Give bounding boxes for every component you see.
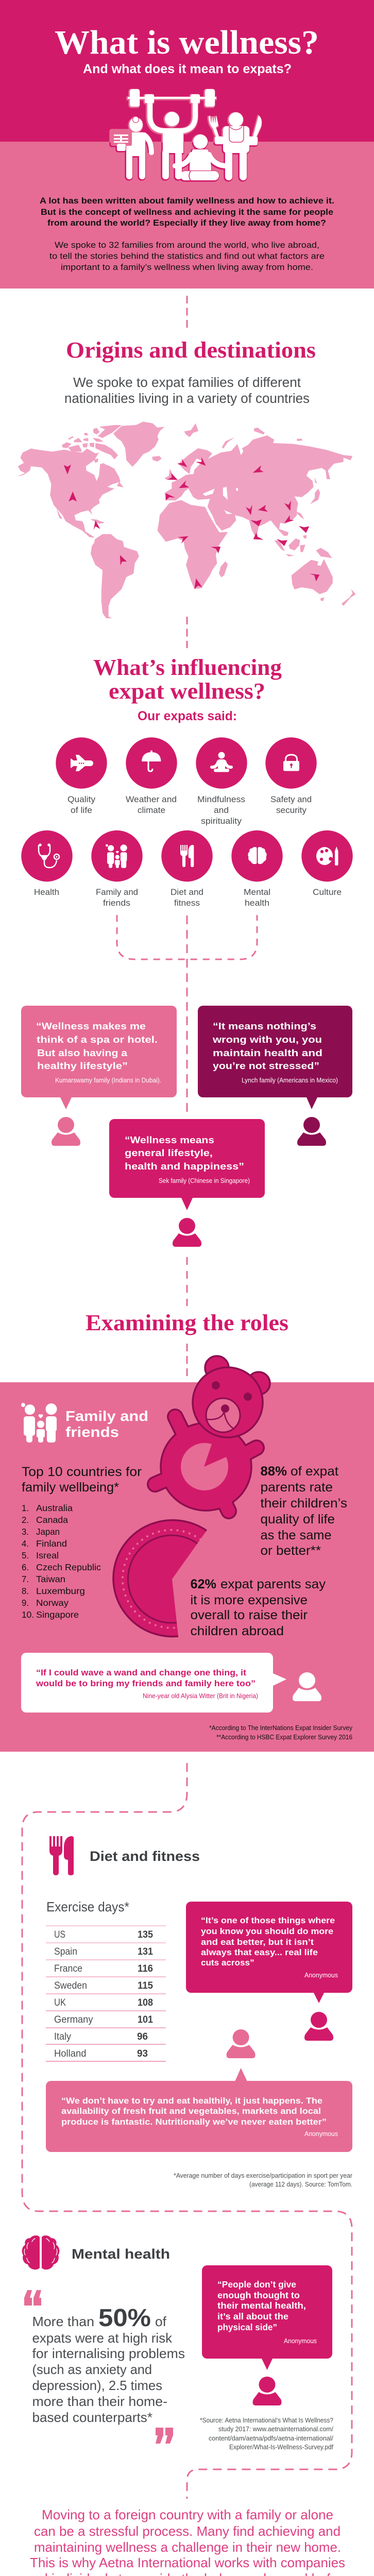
text: 50 percent stat: depression), 2.5 times	[32, 2378, 162, 2393]
list: top 10 countries: 5.	[22, 1550, 29, 1561]
text: 88 percent stat: 88%	[261, 1464, 287, 1479]
text: expat families: We spoke to expat families of different	[73, 376, 301, 390]
quote: Lynch family: you’re not stressed”	[213, 1060, 319, 1071]
text: 50 percent stat: of	[155, 2314, 167, 2329]
factor: culture: Culture	[313, 887, 342, 897]
icon: person	[293, 1672, 321, 1701]
list: top 10 countries: 2.	[22, 1515, 29, 1525]
quote: Kumarswamy family: “Wellness makes me	[36, 1021, 146, 1031]
chart: teddy bear 88 percent	[155, 1356, 270, 1511]
factor: weather and climate: Weather and	[126, 794, 177, 804]
icon: person	[173, 1218, 201, 1247]
footnotes: family sources: *According to The InterNations Expat Insider Survey	[209, 1724, 352, 1732]
text: expat families	[64, 376, 310, 406]
factor: quality of life: Quality	[67, 794, 95, 804]
quote: Kumarswamy family: think of a spa or hotel.	[37, 1034, 158, 1045]
quote: Sek family: “Wellness means	[125, 1134, 214, 1145]
list: top 10 countries: 7.	[22, 1574, 29, 1584]
chart: plate 62 percent	[113, 1520, 207, 1637]
list: top 10 countries: Singapore	[36, 1609, 79, 1620]
table: exercise days: France	[54, 1963, 82, 1974]
heading: what's influencing expat wellness: expat wellness?	[109, 679, 265, 704]
quote: real life cuts across: always that easy... real life	[201, 1948, 318, 1957]
panel: header	[0, 0, 374, 289]
factor: family and friends: friends	[103, 898, 130, 908]
icon: family	[21, 1403, 57, 1443]
icon: stethoscope	[39, 844, 59, 868]
icon: closing quotation mark	[156, 2428, 173, 2444]
icon: person	[252, 2377, 281, 2405]
factor: family and friends: Family and	[96, 887, 138, 897]
table: exercise days: US	[54, 1929, 65, 1940]
list: top 10 countries: Taiwan	[36, 1574, 65, 1584]
icon: fork and knife	[49, 1836, 74, 1875]
table: exercise days: Sweden	[54, 1980, 87, 1991]
heading: what's influencing expat wellness	[93, 655, 282, 704]
quote: Lynch family: wrong with you, you	[212, 1034, 322, 1045]
quote: Kumarswamy family	[21, 1006, 177, 1146]
list: top 10 countries: Czech Republic	[36, 1562, 101, 1572]
text: moving to a foreign country: This is why Aetna International works with companies	[30, 2555, 345, 2570]
quote: eaten better: availability of fresh fruit and vegetables, markets and local	[61, 2107, 321, 2116]
table: exercise days: Germany	[54, 2014, 93, 2025]
text: 62 percent stat: 62%	[191, 1577, 216, 1591]
text: 50 percent stat: More than	[32, 2314, 94, 2329]
quote: Sek family: Sek family (Chinese in Singapore)	[159, 1177, 250, 1184]
table: exercise days: Holland	[54, 2048, 87, 2059]
intro bold text: from around the world? Especially if they live away from home?	[47, 218, 326, 228]
title: What is wellness?	[55, 24, 319, 61]
heading: what's influencing expat wellness: What’s influencing	[93, 655, 282, 680]
text: 50 percent stat: expats were at high risk	[32, 2330, 173, 2346]
list: top 10 countries: Isreal	[36, 1550, 59, 1561]
text: 50 percent stat: 50%	[98, 2304, 151, 2332]
quote: Alysia Witter: “If I could wave a wand and change one thing, it	[36, 1668, 247, 1677]
table: exercise days: Spain	[54, 1946, 77, 1957]
heading: diet and fitness: Diet and fitness	[90, 1849, 200, 1864]
quote: Lynch family: maintain health and	[213, 1047, 322, 1058]
text: 50 percent stat: more than their home-	[32, 2394, 167, 2409]
icon: umbrella	[142, 750, 161, 771]
text: 88 percent stat: as the same	[261, 1528, 332, 1543]
factor: mental health: Mental	[244, 887, 270, 897]
quote: Sek family: health and happiness”	[125, 1161, 244, 1172]
heading: family and friends: Family and	[65, 1408, 148, 1424]
text: 50 percent stat: for internalising problems	[32, 2346, 185, 2361]
subheading: our expats said: Our expats said:	[138, 709, 237, 723]
quote: real life cuts across: Anonymous	[304, 1971, 338, 1979]
factor: quality of life: of life	[71, 805, 92, 815]
icon: meditating person	[212, 752, 231, 772]
factor: safety and security: security	[276, 805, 307, 815]
text: moving to a foreign country: Moving to a foreign country with a family or alone	[42, 2507, 333, 2522]
factor: health: Health	[34, 887, 59, 897]
quote: physical side	[202, 2265, 332, 2405]
list: top 10 countries: Norway	[36, 1598, 69, 1608]
list: top 10 countries: Luxemburg	[36, 1586, 85, 1596]
factor: diet and fitness: Diet and	[171, 887, 203, 897]
quote: Lynch family: Lynch family (Americans in Mexico)	[242, 1076, 338, 1084]
quote: Kumarswamy family: But also having a	[37, 1047, 128, 1058]
table: exercise days: 131	[138, 1946, 153, 1957]
dashed connector	[186, 1344, 188, 1376]
footnote: mental health source	[200, 2416, 333, 2451]
heading: origins and destinations: Origins and destinations	[66, 337, 316, 363]
text: 62 percent stat	[191, 1577, 326, 1638]
list heading: top 10 countries	[22, 1465, 142, 1495]
icon: brain	[248, 847, 267, 864]
map arrows	[64, 457, 319, 589]
quote: eaten better: “We don’t have to try and eat healthily, it just happens. The	[61, 2096, 322, 2106]
icon: brain	[22, 2235, 59, 2269]
factor: mental health	[231, 831, 283, 908]
list: top 10 countries: Canada	[36, 1515, 68, 1525]
table: exercise days: UK	[54, 1997, 66, 2008]
factor: diet and fitness	[161, 831, 213, 908]
icon: person	[227, 2029, 256, 2058]
icon: person	[297, 1117, 326, 1146]
text: 50 percent stat: based counterparts*	[32, 2410, 152, 2425]
icon: family	[106, 844, 127, 868]
table: exercise days: 116	[138, 1963, 153, 1974]
section: mental health	[22, 2235, 333, 2451]
text: moving to a foreign country: can be a stressful process. Many find achieving and	[34, 2523, 341, 2539]
icon: fork and knife	[180, 845, 194, 867]
factor: mindfulness and spirituality	[196, 737, 247, 826]
footnotes: family sources: **According to HSBC Expat Explorer Survey 2016	[216, 1733, 352, 1741]
text: 50 percent stat	[32, 2304, 185, 2425]
list: top 10 countries: 3.	[22, 1527, 29, 1537]
icon: padlock	[283, 755, 299, 771]
icon: person	[304, 2012, 333, 2041]
intro bold text: A lot has been written about family wellness and how to achieve it.	[40, 196, 334, 206]
list heading: top 10 countries: family wellbeing*	[22, 1480, 119, 1495]
quote: eaten better	[46, 2029, 352, 2152]
factor: diet and fitness: fitness	[174, 898, 200, 908]
factor: safety and security	[265, 737, 317, 815]
text: 62 percent stat: overall to raise their	[191, 1608, 308, 1622]
text: 50 percent stat: (such as anxiety and	[32, 2362, 152, 2377]
table: exercise days: 108	[138, 1997, 153, 2008]
heading: examining the roles: Examining the roles	[86, 1310, 288, 1335]
text: 88 percent stat: their children’s	[261, 1496, 347, 1511]
factor: quality of life	[56, 737, 107, 815]
quote: physical side: Anonymous	[284, 2337, 317, 2345]
table: exercise days: 135	[138, 1929, 153, 1940]
quote: Sek family	[109, 1119, 265, 1247]
intro bold text	[40, 196, 334, 228]
list: top 10 countries: 8.	[22, 1586, 29, 1596]
quote: real life cuts across: and eat better, but it isn’t	[201, 1938, 314, 1947]
text: 88 percent stat: parents rate	[261, 1480, 333, 1495]
footnotes: family sources	[209, 1724, 352, 1741]
dashed connector	[186, 617, 188, 648]
quote: physical side: their mental health,	[217, 2300, 306, 2311]
quote: physical side: enough thought to	[217, 2290, 300, 2300]
list: top 10 countries: 9.	[22, 1598, 29, 1608]
factor: mindfulness and spirituality: and	[214, 805, 229, 815]
quote: Alysia Witter: would be to bring my friends and family here too”	[36, 1679, 256, 1688]
text: 88 percent stat	[261, 1464, 347, 1558]
quote: Kumarswamy family: healthy lifestyle”	[37, 1060, 128, 1071]
quote: Lynch family	[198, 1006, 352, 1146]
table: exercise days: 96	[137, 2031, 148, 2042]
footnote: exercise source: (average 112 days). Source: TomTom.	[249, 2180, 352, 2188]
footnote: mental health source: study 2017: www.aetnainternational.com/	[218, 2425, 333, 2433]
table: exercise days: Italy	[54, 2031, 71, 2042]
dashed connector	[186, 1257, 188, 1306]
list: top 10 countries: Japan	[36, 1527, 60, 1537]
table: exercise days: 93	[137, 2048, 148, 2059]
quote: eaten better: produce is fantastic. Nutritionally we’ve never eaten better”	[61, 2117, 327, 2127]
factor: mental health: health	[245, 898, 269, 908]
dashed connector	[186, 296, 188, 328]
quote: real life cuts across	[186, 1902, 352, 2041]
icon: paint palette and brush	[316, 846, 338, 866]
quote: Alysia Witter	[21, 1653, 321, 1713]
table: exercise days: 115	[138, 1980, 153, 1991]
quote: real life cuts across: you know you should do more	[201, 1927, 333, 1936]
list: top 10 countries: 1.	[22, 1503, 29, 1513]
text: 62 percent stat: it is more expensive	[191, 1593, 308, 1607]
quote: Lynch family: “It means nothing’s	[213, 1021, 316, 1031]
panel: family and friends	[0, 1356, 374, 1752]
heading: family and friends: friends	[65, 1424, 119, 1440]
quote: physical side: physical side”	[217, 2322, 277, 2332]
intro regular text: important to a family’s wellness when living away from home.	[61, 262, 313, 272]
footnote: mental health source: *Source: Aetna International’s What Is Wellness?	[200, 2416, 333, 2424]
heading: family and friends	[65, 1408, 148, 1440]
icon: airplane	[71, 755, 93, 771]
text: expat families: nationalities living in a variety of countries	[64, 392, 310, 406]
text: 88 percent stat: or better**	[261, 1544, 321, 1558]
factor: mindfulness and spirituality: spirituality	[201, 816, 242, 826]
illustration: weightlifter, doctor, meditator and chef	[110, 89, 262, 181]
table: exercise days: 101	[138, 2014, 153, 2025]
quote: Kumarswamy family: Kumarswamy family (Indians in Dubai).	[55, 1076, 161, 1084]
list: top 10 countries: 4.	[22, 1538, 29, 1549]
icon: person	[52, 1117, 80, 1146]
dashed connector winding through sections	[22, 1763, 352, 2499]
list: top 10 countries: Australia	[36, 1503, 73, 1513]
quote: Alysia Witter: Nine-year old Alysia Witter (Brit in Nigeria)	[143, 1692, 258, 1700]
factor: safety and security: Safety and	[270, 794, 312, 804]
footnote: exercise source	[174, 2172, 353, 2188]
factor: health	[21, 831, 73, 897]
footnote: mental health source: content/dam/aetna/pdfs/aetna-international/	[209, 2434, 333, 2442]
subtitle: And what does it mean to expats?	[83, 62, 292, 76]
text: 88 percent stat: quality of life	[261, 1512, 335, 1527]
list: top 10 countries: 10.	[22, 1609, 34, 1620]
intro regular text: to tell the stories behind the statistics and find out what factors are	[49, 251, 325, 261]
intro regular text: We spoke to 32 families from around the world, who live abroad,	[55, 240, 319, 250]
factor: culture	[301, 831, 353, 897]
list: top 10 countries: Finland	[36, 1538, 67, 1549]
quote: Sek family: general lifestyle,	[125, 1147, 213, 1158]
heading: mental health: Mental health	[72, 2246, 170, 2262]
text: 62 percent stat: children abroad	[191, 1624, 284, 1638]
factor: weather and climate	[126, 737, 177, 815]
quote: real life cuts across: cuts across”	[201, 1958, 254, 1968]
factor: weather and climate: climate	[138, 805, 165, 815]
list: top 10 countries: 6.	[22, 1562, 29, 1572]
quote: physical side: “People don’t give	[217, 2279, 296, 2290]
factor: mindfulness and spirituality: Mindfulness	[197, 794, 245, 804]
quote: real life cuts across: “It’s one of those things where	[201, 1916, 335, 1925]
world map with arrows	[16, 421, 356, 618]
quote: physical side: it’s all about the	[217, 2311, 288, 2321]
text: 62 percent stat: expat parents say	[220, 1577, 326, 1591]
footnote: mental health source: Explorer/What-Is-Wellness-Survey.pdf	[229, 2443, 333, 2451]
text: moving to a foreign country	[25, 2507, 350, 2576]
table: exercise days	[46, 1926, 166, 2061]
list: top 10 countries	[22, 1503, 101, 1620]
section: diet and fitness	[46, 1836, 353, 2188]
text: moving to a foreign country: maintaining wellness a challenge in their new home.	[34, 2539, 341, 2555]
intro bold text: But is the concept of wellness and achieving it the same for people	[41, 207, 333, 217]
footnote: exercise source: *Average number of days exercise/participation in sport per year	[174, 2172, 353, 2179]
list heading: top 10 countries: Top 10 countries for	[22, 1465, 142, 1479]
factor: family and friends	[91, 831, 143, 908]
icon: opening quotation mark	[24, 2290, 41, 2306]
text: 88 percent stat: of expat	[291, 1464, 338, 1479]
intro regular text	[49, 240, 325, 272]
table heading: exercise days: Exercise days*	[46, 1899, 129, 1914]
dashed connectors from factors to quotes	[117, 915, 257, 1113]
quote: eaten better: Anonymous	[304, 2130, 338, 2138]
